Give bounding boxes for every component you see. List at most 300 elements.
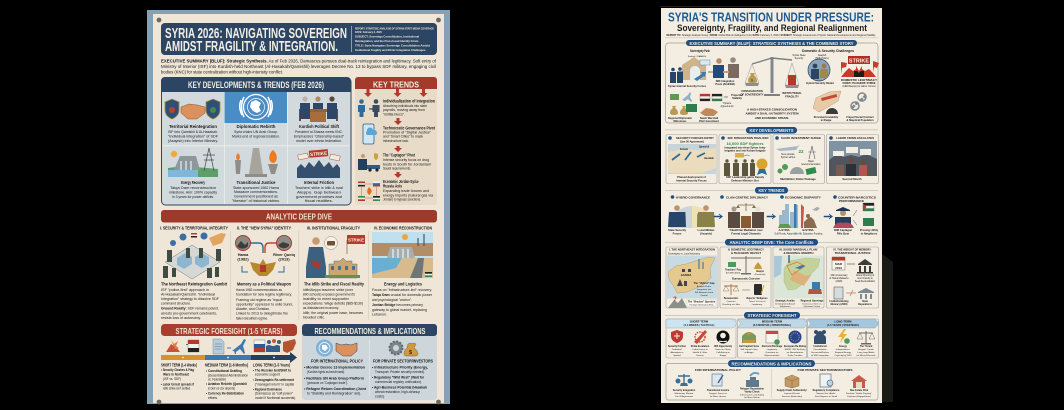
illustration: security forces and arch: SDF Integration	[716, 80, 735, 83]
icon row: private sector: Monitor Gov't Audit:	[816, 392, 836, 395]
card: domestic legitimacy: Bureaucratic	[724, 297, 739, 300]
banner: analytic deep dive	[161, 210, 437, 222]
card: northeast integration: Integration into	[697, 288, 712, 291]
card: saudi marshall plan: Regional Openings	[801, 300, 824, 302]
international policy bullets	[304, 364, 367, 396]
long term: • The Russian Exit/Shift to	[253, 368, 291, 372]
card: internal friction: Teachers' strike in Idlib & rural	[295, 185, 343, 190]
card: diplomatic rebirth: Syria chairs UN Arab Group.	[234, 129, 278, 134]
trend: clan-centric diplomacy: CLAN-CENTRIC DIPLOMACY	[726, 196, 768, 200]
short term: • Security Clashes & Flag	[161, 367, 194, 372]
panel: long term: LONG-TERM	[835, 320, 852, 324]
card: saudi investment surge: Multibillion Dollar Package	[780, 177, 816, 181]
column: security and territorial integrity: The Northeast Reintegration Gambit	[161, 282, 227, 288]
column: economic reconstruction: and psychological "anchor".	[372, 297, 412, 302]
column: new syria identity	[236, 226, 296, 320]
column: economic reconstruction: Lebanon.	[372, 312, 387, 316]
international policy bullets: to "Stability and Reintegration" aid).	[307, 390, 361, 396]
section: key developments	[665, 127, 878, 184]
title banner: TITLE: Syria Navigates Sovereign Consolidation Amidst	[355, 44, 430, 48]
callout: high-stakes consolidation	[746, 108, 799, 120]
card: domestic legitimacy: (Demands)	[755, 274, 766, 276]
trend: clan-centric diplomacy: Formal Legal Channels	[731, 232, 761, 236]
trend: clan-centric diplomacy: Tribal/Clan Mediation over	[729, 228, 763, 232]
title	[665, 10, 878, 38]
illustration: hybrid security and strike: (SDF Police)	[815, 57, 829, 60]
column: new syria identity: foundation for new regime legitimacy.	[236, 292, 292, 296]
executive summary text	[161, 58, 437, 74]
illustration: balance scale	[740, 57, 802, 98]
executive summary text: EXECUTIVE SUMMARY (BLUF): Strategic Synthesis. As of Feb 2026, Damascus pursues dual-track reintegration and legitimacy. Soft entry of	[161, 58, 437, 64]
icon row: international policy: Infrastructure and Safety	[740, 394, 765, 396]
illustration: raqqa map and chain: Persistent Instability	[814, 116, 839, 119]
card: saudi investment surge: 22	[798, 149, 804, 154]
card: weight of memory: Institutionalizing	[830, 300, 849, 303]
medium term: MEDIUM TERM (1-6 Months)	[205, 362, 248, 368]
trend: economic axis: energy imports (natural gas via	[383, 192, 434, 198]
trend: counter-narcotics performance: COUNTER-NARCOTICS	[838, 196, 876, 200]
card: energy recovery: milestone. Aim: 100% capacity	[169, 190, 217, 194]
card: security forces entry: Internal Security Forces	[676, 178, 707, 182]
medium term: • Currency Re-Stabilization	[206, 390, 244, 396]
illustration: hybrid security and strike: Asayish	[818, 54, 827, 57]
panel: short term: Seize on Chaos	[715, 349, 732, 351]
card: saudi investment surge: Syrian airline	[781, 156, 796, 159]
panel: executive summary: Sovereignty Push	[690, 49, 710, 53]
icon row: international policy: Transitional Justice	[707, 389, 730, 392]
column: economic reconstruction: Jordan Bridge becomes primary	[372, 302, 423, 307]
panel: long term: Successful/Failure	[811, 351, 830, 354]
trend: economic axis: Economic Jordan-Syria-	[383, 179, 419, 184]
card: territorial reintegration: (Asayish) into Interior Ministry.	[168, 138, 218, 143]
panel: key trends: KEY TRENDS	[373, 80, 420, 89]
trend: counter-narcotics performance	[833, 195, 879, 236]
card: domestic legitimacy: Checking out Jobs	[722, 303, 741, 306]
trend: counter-narcotics performance: 39M Captagon	[834, 228, 853, 232]
panel: medium term: Gulf Capital Flows	[739, 345, 760, 348]
callout: high-stakes consolidation: A HIGH-STAKES CONSOLIDATION	[747, 108, 798, 112]
card: sdf integration: brigades and one Kobani brigade	[724, 148, 766, 152]
panel: long term: Capacity by 2030	[835, 354, 852, 357]
card: weight of memory: 44th Anniversary	[830, 274, 848, 277]
trend: technocratic governance: Promotion of "Digital Justice"	[383, 130, 432, 134]
panel: recommendations and implications: RECOMMENDATIONS & IMPLICATIONS	[732, 361, 812, 366]
card: transitional justice: Government positioned as	[234, 194, 278, 198]
trend: counter-narcotics performance: PERFORMANCE	[839, 199, 864, 203]
trend: individualization: payrolls, moving away from	[383, 107, 425, 112]
card: saudi marshall plan	[773, 247, 824, 308]
timeline arrow	[161, 352, 297, 363]
card: internal friction: government promises and	[296, 194, 342, 199]
panel: medium term: SWIFT / EU Re-Entry	[785, 348, 806, 351]
illustration: raqqa map and chain	[813, 91, 874, 122]
card: weight of memory: of Hama Massacre	[829, 277, 849, 280]
card: energy recovery: in 3 years for power deficits.	[172, 194, 214, 199]
long term: economic support	[255, 372, 281, 377]
card: northeast integration: Asayish Police	[697, 285, 712, 288]
card: labor crisis escalates: Second Month	[842, 177, 862, 181]
icon row: international policy: Monitoring: Monitor	[675, 392, 694, 395]
icon row: international policy: for Mass Graves	[710, 395, 727, 398]
illustration: raqqa map and chain: Frayed Social Contract	[846, 116, 874, 119]
card: weight of memory: Grand Opening of	[856, 274, 874, 277]
column: economic reconstruction: Taiqa Dam crucial for domestic power	[372, 292, 433, 297]
card: kurdish political shift: Emphasizes "citizenship-based"	[294, 134, 345, 139]
column: security and territorial integrity: resists loss of autonomy.	[161, 315, 201, 320]
section: key trends: KEY TRENDS	[758, 188, 785, 193]
panel: short term: Health & Other	[693, 351, 708, 354]
icon row: international policy: Vanity Check	[745, 390, 760, 394]
illustration: regional diplomacy and investment: Milestones	[674, 120, 687, 123]
panel: recommendations and implications: FOR INTERNATIONAL POLICY	[311, 358, 363, 364]
title banner: Reintegration, and the Post-Assad Identity Crisis.	[355, 40, 419, 43]
column: institutional fragility: Idlib/Aleppo teachers' strike (over	[303, 287, 354, 292]
trend: captagon pivot: Saudi requirements.	[383, 166, 411, 171]
illustration: memory flow	[236, 236, 296, 276]
illustration: memory flow: Hama	[238, 252, 249, 257]
icon row: international policy: Jan 30 Agreement	[675, 395, 693, 398]
illustration: regional diplomacy and investment	[668, 92, 743, 123]
icon row: private sector: Regulatory Compliance	[813, 389, 840, 392]
card: weight of memory: State	[862, 300, 869, 303]
private sector bullets: Transport; Private security needed).	[375, 369, 425, 374]
long term: (Damascus as "soft-power"	[255, 391, 293, 396]
card: security forces entry: Kobani	[680, 148, 688, 151]
column: new syria identity: opportunity" oppressor to unite Sunni,	[236, 302, 293, 306]
panel: executive summary: Domestic & Security Challenges	[802, 49, 854, 53]
panel: medium term: Questions on	[766, 351, 779, 354]
panel: short term: SHORT-TERM	[690, 320, 709, 324]
panel: short term: Strike Escalation	[691, 345, 710, 348]
card: weight of memory: 2013	[835, 266, 842, 270]
callout: high-stakes consolidation: AND ECONOMIC STRAIN.	[755, 116, 789, 120]
card: weight of memory	[826, 247, 878, 308]
column: institutional fragility: III. INSTITUTIONAL FRAGILITY	[307, 226, 360, 230]
card: northeast integration: The "Shadow" Question	[688, 300, 716, 304]
icon row: international policy: Refugee Repatriation	[740, 388, 765, 390]
panel: long term: Regional Energy	[835, 351, 852, 354]
card: saudi investment surge: telecommunication	[801, 163, 821, 166]
international policy bullets: • Refugee Return Coordination (Joint	[304, 386, 367, 391]
trend: captagon pivot: Intense security focus on drug	[383, 157, 429, 162]
icon row: international policy: Security Integration	[673, 389, 696, 392]
panel: medium term: Legitimacy	[767, 348, 778, 351]
illustration: balance scale: $	[751, 78, 754, 82]
panel: executive summary	[666, 40, 879, 123]
illustration: memory flow: River Queiq	[273, 252, 296, 257]
card: kurdish political shift: President al-Sharaa meets KNC.	[295, 129, 343, 134]
illustration: balance scale: INSTITUTIONAL	[782, 91, 802, 95]
card: northeast integration	[666, 247, 718, 308]
trend: captagon pivot	[358, 152, 432, 172]
section: strategic foresight	[161, 324, 297, 400]
icons: un and handshake	[316, 340, 357, 356]
section: strategic foresight: STRATEGIC FORESIGHT	[748, 313, 797, 318]
trend: economic axis: Russia Axis	[383, 184, 402, 188]
trend: captagon pivot: busts in South for Jordanian/	[383, 162, 432, 166]
panel: medium term: Electoral Blockage	[762, 345, 783, 348]
long term: • Regional Dominance	[253, 386, 283, 392]
card: weight of memory: Gov't Family to	[857, 277, 873, 280]
trend: economic disparity: Idlib Mtr. Education Funding	[794, 232, 823, 236]
illustration: hybrid security and strike: (Idlib/Aleppo) & Labor Unrest	[842, 85, 876, 88]
trend: technocratic governance: Technocratic Governance Pivot	[383, 126, 435, 130]
column: new syria identity: Hama 1982 commemorations as	[236, 287, 282, 292]
card: internal friction	[295, 149, 343, 203]
panel: medium term: Gulf Capital Cities	[740, 348, 759, 351]
illustration: raqqa map and chain: in Raqqa	[821, 119, 832, 122]
card: saudi marshall plan: Strategic Axality	[775, 300, 795, 302]
card: northeast integration: Control	[700, 294, 708, 297]
column: security and territorial integrity: I. SECURITY & TERRITORIAL INTEGRITY	[160, 226, 228, 230]
column: economic reconstruction	[372, 226, 433, 316]
card: territorial reintegration: ISF into Qamishli & Al-Hasakah.	[168, 129, 218, 134]
trend: economic disparity: B-SYRIA	[802, 228, 814, 232]
panel: recommendations and implications: FOR PRIVATE SECTOR/INVESTORS	[373, 358, 433, 364]
card: transitional justice	[232, 148, 280, 203]
column: security and territorial integrity	[160, 226, 228, 320]
panel: long term: Long Legal Battle	[857, 351, 875, 354]
card: territorial reintegration: "Individual integration" of SDF	[168, 134, 219, 139]
card: northeast integration: Sovereignty vs. Local Autonomy	[668, 252, 701, 256]
executive summary text: Ministry of Interior (ISF) into Kurdish-held Northeast (Al-Hasakah/Qamishli) leverages Decree No. 13 to bypass SDF military, engaging civil	[161, 64, 436, 69]
panel: medium term: European Re-Rating	[784, 345, 807, 348]
panel: medium term: MEDIUM-TERM	[762, 320, 783, 324]
column: new syria identity: Alawite, and Christian.	[236, 306, 270, 311]
column: institutional fragility: expectations. Wage deficits ($85-$130)	[303, 300, 364, 306]
trend: economic disparity: Gulf Funds, Airport	[774, 232, 794, 236]
card: kurdish political shift	[294, 96, 345, 143]
panel: key developments and trends: KEY DEVELOPMENTS & TRENDS (FEB 2026)	[188, 80, 324, 90]
card: labor crisis escalates: LABOR CRISIS ESCALATES	[836, 136, 874, 140]
panel: short term: (1-4 WEEKS | TACTICAL)	[684, 323, 714, 327]
trend: economic disparity	[774, 195, 823, 236]
panel: recommendations and implications: FOR PRIVATE SECTOR/INVESTORS	[798, 368, 852, 372]
illustration: security forces and arch: Posts (Abdi/DM)	[715, 83, 735, 86]
card: internal friction: Internal Friction	[304, 180, 334, 186]
card: sdf integration: 16,000 SDF fighters	[726, 141, 764, 146]
trend: individualization: Absorbing individuals into state	[383, 103, 427, 108]
long term: • Demographic Re-settlement	[253, 377, 295, 382]
column: economic reconstruction: Focus on "infrastructure-led" recovery.	[372, 287, 432, 292]
title: REPORT TO: Strategic Analysis Group | FROM: Global Risk & Intelligence Unit | DATE: February 3, 2026 | SUBJECT: Strategic Assessment of Syria's National Developments and Regional Stability	[666, 34, 876, 37]
icons: gear and money bag: $	[409, 350, 412, 356]
illustration: hybrid security and strike	[792, 54, 879, 88]
trend: hybrid governance: (Asayish)	[700, 232, 712, 236]
panel: long term: Energy	[839, 346, 848, 348]
private sector bullets: • Regulatory "Wild West" (Wait for	[372, 374, 424, 380]
card: security forces entry	[666, 134, 717, 184]
short term: SHORT TERM (1-4 Weeks)	[161, 362, 197, 368]
card: northeast integration: Foreign Information Risk	[690, 304, 714, 306]
column: institutional fragility: Idlib, the original power base, becomes	[303, 310, 363, 315]
illustration: hybrid security and strike: Hybrid Security Model	[806, 81, 834, 85]
column: new syria identity: fallen Ba'athist regime.	[236, 315, 268, 320]
card: northeast integration: ISF Between Local	[695, 291, 714, 294]
card: domestic legitimacy	[720, 247, 771, 308]
card: energy recovery: Taiqa Dam reconstruction	[170, 185, 216, 190]
card: saudi investment surge: New private	[781, 153, 795, 156]
card: kurdish political shift: model over ethnic federation.	[296, 138, 342, 143]
illustration: regional diplomacy and investment: Plan' Investment	[699, 120, 719, 123]
medium term: • Aviation Rebirth (Qamishli	[206, 381, 247, 386]
card: transitional justice: "liberator" of historical victims.	[232, 198, 280, 203]
trend: technocratic governance	[363, 124, 435, 144]
private sector bullets: commercial registry unification).	[375, 379, 422, 384]
card: saudi marshall plan: Damascus Seen as	[803, 304, 822, 306]
icon row: private sector: Due Estate Risk	[850, 389, 869, 392]
card: domestic legitimacy: Coercion	[727, 300, 736, 303]
illustration: northeast grid	[163, 232, 226, 279]
international policy bullets: (Kurdish rights as benchmark).	[307, 369, 345, 374]
card: domestic legitimacy: Legitimacy	[752, 303, 763, 306]
section: analytic deep dive	[665, 239, 878, 308]
card: internal friction: Aleppo. Gap between	[297, 190, 341, 194]
trend: counter-narcotics performance: to Neighbors	[861, 232, 878, 236]
panel: long term: (1-5 YEARS | STRATEGIC)	[827, 323, 859, 327]
section: strategic foresight	[665, 312, 879, 358]
card: weight of memory: Reparations	[858, 303, 873, 306]
illustration: dam and logistics	[372, 232, 433, 278]
title banner	[161, 23, 437, 55]
card: weight of memory: IV. THE WEIGHT OF MEMORY:	[834, 248, 872, 252]
column: new syria identity: Framing old regime as "equal	[236, 297, 282, 302]
panel: recommendations and implications: RECOMMENDATIONS & IMPLICATIONS	[314, 326, 426, 336]
illustration: regional diplomacy and investment: Agreements	[721, 105, 734, 108]
card: domestic legitimacy: Teachers' Pay	[725, 268, 742, 272]
long term: ("managed return" in capital	[255, 381, 294, 386]
trend: counter-narcotics performance: Pills Bust	[837, 232, 849, 236]
private sector bullets: • Infrastructure Priority (Energy,	[372, 364, 428, 370]
illustration: memory flow: (1982)	[237, 256, 249, 262]
panel: short term: ISIS Opportunity	[714, 345, 733, 348]
column: new syria identity: Linked to 2013 to delegitimize the	[236, 310, 288, 316]
card: saudi marshall plan: Diplomatic Partner	[804, 305, 821, 308]
card: northeast integration: JAZIRA	[681, 273, 692, 277]
icon row: international policy	[673, 373, 765, 399]
illustration: regional diplomacy and investment: Saudi 'Marshall	[700, 117, 718, 120]
column: institutional fragility: bloodied critic.	[303, 314, 325, 320]
card: internal friction: STRIKE	[310, 151, 327, 157]
panel: recommendations and implications	[666, 360, 878, 400]
column: institutional fragility: The Idlib Strike and Fiscal Reality	[304, 282, 364, 288]
column: security and territorial integrity: command structure.	[161, 300, 191, 306]
column: economic reconstruction: gateway to global market, replacing	[372, 307, 427, 312]
panel: short term: Sectors	[696, 354, 705, 357]
icon row: international policy: for Mass Return	[744, 396, 761, 399]
card: sdf integration: SDF Leadership gains Deputy	[726, 175, 765, 179]
card: kurdish political shift: Kurdish Political Shift	[299, 124, 339, 130]
column: institutional fragility: 800 schools) exposes government's	[303, 292, 355, 296]
panel: key developments and trends	[161, 77, 351, 205]
trend: individualization: vs	[369, 107, 373, 111]
title banner: DATE: February 3, 2026	[355, 31, 382, 34]
illustration: teacher strike school: STRIKE	[348, 238, 364, 242]
card: domestic legitimacy: II. DOMESTIC LEGITIMACY	[728, 248, 764, 252]
illustration: hybrid security and strike: DOMESTIC LEGITIMACY	[841, 79, 877, 82]
trend: hybrid governance	[668, 195, 715, 236]
panel: long term: The "Grand	[860, 346, 873, 348]
panel: recommendations and implications: FOR INTERNATIONAL POLICY	[695, 368, 741, 372]
section: analytic deep dive: ANALYTIC DEEP DIVE: The Core Conflicts	[730, 240, 814, 245]
icon row: private sector: Logistics/Private	[784, 392, 801, 395]
card: territorial reintegration	[165, 99, 220, 143]
private sector bullets: • Agri-Business Potential (Hasakah	[372, 384, 428, 390]
card: weight of memory: (2026)	[836, 281, 843, 283]
card: weight of memory: Seek Reconciliation	[855, 280, 876, 283]
trend: economic disparity: A-SYRIA	[778, 228, 790, 232]
card: saudi investment surge: SAUDI INVESTMENT SURGE	[781, 136, 821, 140]
medium term	[205, 362, 248, 400]
column: institutional fragility	[303, 226, 365, 320]
card: transitional justice: State-sponsored 1982 Hama	[233, 185, 280, 190]
trend: hybrid governance: HYBRID GOVERNANCE	[676, 196, 710, 200]
trend: technocratic governance: infrastructure lack.	[383, 138, 409, 143]
card: diplomatic rebirth: Diplomatic Rebirth	[236, 124, 276, 130]
dark shadow shape beside right poster	[882, 254, 893, 402]
column: security and territorial integrity: Integration" strategy to dissolve SDF	[161, 296, 220, 301]
column: security and territorial integrity: ISF "police-first" approach in	[161, 287, 209, 292]
icons: tank, flag, document, plane, people, map	[166, 339, 296, 354]
panel: short term: Absorption or	[670, 351, 684, 354]
card: domestic legitimacy: & TEACHERS' REVOLT	[731, 251, 761, 255]
panel: short term: Security Friction	[668, 345, 687, 348]
trend: economic axis: Expanding trade forums and	[383, 188, 429, 193]
illustration: hybrid security and strike: Syrian State	[792, 54, 806, 57]
icon row: private sector: Supply Chain Authenticity:	[777, 389, 807, 392]
title banner: SYRIA 2026: NAVIGATING SOVEREIGN	[165, 25, 347, 42]
panel: long term: Bargain" Trends	[858, 348, 875, 351]
icon row: private sector: Services (Education)	[782, 395, 802, 398]
medium term: vs. Federalism)	[208, 376, 226, 381]
panel: medium term: Representation	[765, 354, 780, 357]
card: saudi marshall plan: III. SAUDI 'MARSHALL PLAN'	[780, 248, 818, 252]
card: northeast integration: ?	[673, 297, 677, 303]
section: key developments: KEY DEVELOPMENTS	[750, 128, 794, 133]
card: security forces entry: Hasakah	[704, 157, 714, 160]
illustration: security forces and arch: Syrian Internal Security Forces	[668, 84, 707, 88]
short term: Idlib strike isn't settled.	[163, 386, 191, 391]
panel: medium term: Trade Corridors	[787, 354, 804, 357]
international policy bullets: (pressure on "Captagon trade").	[307, 380, 348, 385]
panel: medium term: in Aleppo	[744, 351, 754, 354]
card: domestic legitimacy: Tutors" & Loss of	[749, 300, 766, 303]
section: key trends	[665, 187, 879, 236]
column: security and territorial integrity: Ground Reality: SDF remains potent,	[161, 306, 219, 311]
poster: Syria 2026 navigating sovereign	[147, 10, 450, 404]
trend: hybrid governance: Local Militias	[698, 228, 715, 232]
card: internal friction: fiscal realities.	[305, 198, 333, 203]
icon row: private sector: Evaluate "Stable Property"	[846, 392, 872, 395]
illustration: regional diplomacy and investment: Stability	[732, 97, 742, 100]
trend: individualization: "militia blocs".	[383, 111, 405, 116]
illustration: raqqa map and chain: & Skeptical Population	[846, 119, 874, 122]
illustration: memory flow: (2013)	[278, 256, 290, 262]
illustration: hybrid security and strike: STRIKE	[849, 58, 869, 64]
card: transitional justice: Massacre commemorations.	[234, 189, 278, 194]
card: saudi investment surge: Major	[808, 160, 814, 163]
private sector bullets: wheat restoration, high-cleanup	[375, 389, 420, 394]
title banner: SUBJECT: Sovereign Consolidation, Institutional	[355, 36, 419, 38]
trend: individualization: Individualization of Integration	[383, 98, 435, 104]
panel: long term	[808, 319, 879, 358]
trend: technocratic governance: and "Smart Cities" to mask	[383, 134, 423, 138]
title: Sovereignty, Fragility, and Regional Realignment	[677, 23, 868, 34]
card: saudi marshall plan: & REGIONAL REBIRTH	[784, 251, 814, 255]
title banner: AMIDST FRAGILITY & INTEGRATION.	[165, 38, 338, 55]
medium term: & Deir ez-Zor airports)	[208, 385, 235, 390]
panel: medium term: on Normalization	[787, 351, 804, 354]
